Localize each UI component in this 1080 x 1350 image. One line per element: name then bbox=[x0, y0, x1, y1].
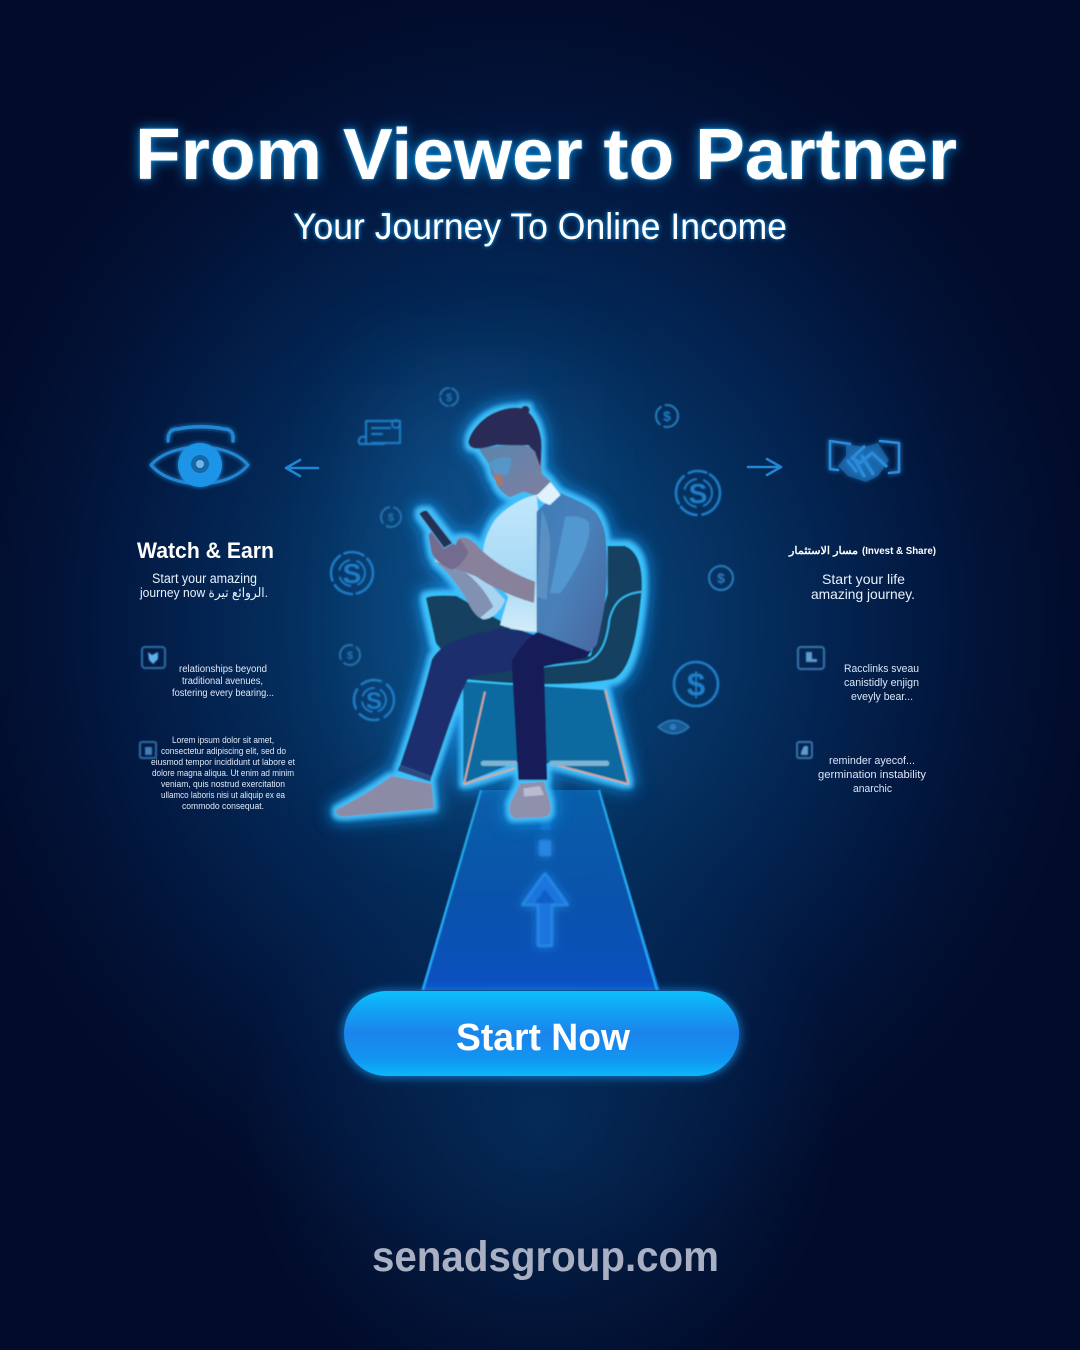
text: watch and earn description: Start your amazing bbox=[152, 571, 257, 586]
text: relationships: relationships beyond bbox=[179, 664, 267, 675]
shoes bbox=[336, 776, 551, 818]
icon: coin 7 bbox=[340, 645, 360, 665]
text: lorem ipsum: veniam, quis nostrud exercitation bbox=[161, 779, 285, 789]
icon: coin 6: S bbox=[343, 558, 361, 589]
icon: coin 3 bbox=[676, 471, 720, 515]
text: lorem ipsum: Lorem ipsum dolor sit amet, bbox=[172, 735, 274, 745]
text: invest and share description: amazing journey. bbox=[811, 586, 915, 602]
text: reminder bbox=[818, 755, 927, 795]
text: relationships: fostering every bearing... bbox=[172, 688, 274, 699]
icon: coin 6 bbox=[331, 552, 373, 594]
icon: dollar coin bbox=[674, 662, 718, 706]
text: invest and share description: Start your life bbox=[822, 571, 905, 587]
text: reminder: germination instability bbox=[818, 769, 927, 781]
icon: coin 7: $ bbox=[347, 650, 353, 662]
text: reminder: reminder ayecof... bbox=[829, 755, 915, 767]
icon: book card bbox=[140, 742, 156, 758]
text: racclinks: eveyly bear... bbox=[851, 691, 913, 703]
panel: left column bbox=[137, 427, 318, 811]
text: watch and earn description: journey now الروائع تيرة. bbox=[139, 585, 268, 601]
icon: coin 1: $ bbox=[446, 392, 452, 404]
text: lorem ipsum: eiusmod tempor incididunt ut labore et bbox=[151, 757, 295, 767]
head bbox=[468, 406, 551, 497]
arrow: to watch and earn bbox=[286, 460, 318, 476]
button: start now: Start Now bbox=[456, 1017, 630, 1059]
icon: coin 8 bbox=[354, 680, 394, 720]
text: racclinks: canistidly enjign bbox=[844, 677, 919, 689]
heading: invest and share bbox=[788, 545, 936, 557]
icon: coin 2 bbox=[656, 405, 678, 427]
jeans bbox=[397, 628, 592, 782]
panel: right column bbox=[748, 441, 936, 795]
arms and hands bbox=[428, 530, 535, 619]
icon: coin 5: $ bbox=[717, 570, 725, 586]
footer url: senadsgroup.com bbox=[372, 1233, 719, 1281]
panel: floating money icons bbox=[331, 388, 733, 734]
icon: coin 8: S bbox=[366, 688, 382, 715]
icon: coin 4 bbox=[381, 507, 401, 527]
torso bbox=[483, 482, 607, 652]
icon: dollar coin: $ bbox=[687, 666, 705, 703]
heading: invest and share: مسار الاستثمار bbox=[788, 545, 858, 557]
icon: person card bbox=[798, 647, 824, 669]
text: reminder: anarchic bbox=[853, 783, 892, 795]
text: racclinks bbox=[844, 663, 919, 703]
text: lorem ipsum bbox=[151, 735, 295, 811]
background pixel panel behind figure bbox=[380, 385, 565, 785]
icon: coin 4: $ bbox=[388, 512, 394, 524]
text: invest and share description bbox=[811, 571, 915, 602]
icon: eye bbox=[151, 427, 248, 487]
icon: coin 5 bbox=[709, 566, 733, 590]
text: lorem ipsum: consectetur adipiscing elit, sed do bbox=[161, 746, 286, 756]
arrow: to invest and share bbox=[748, 459, 781, 475]
icon: bird card bbox=[142, 647, 165, 668]
text: relationships: traditional avenues, bbox=[182, 676, 263, 687]
subtitle: Your Journey To Online Income bbox=[293, 206, 787, 247]
icon: coin 2: $ bbox=[663, 408, 671, 424]
text: lorem ipsum: commodo consequat. bbox=[182, 801, 264, 811]
text: watch and earn description bbox=[139, 571, 268, 601]
icon: road dashes bbox=[539, 820, 551, 856]
text: lorem ipsum: ullamco laboris nisi ut aliquip ex ea bbox=[161, 790, 285, 800]
icon: handshake bbox=[830, 441, 899, 482]
text: racclinks: Racclinks sveau bbox=[844, 663, 919, 675]
text: relationships bbox=[172, 664, 274, 699]
heading: watch and earn: Watch & Earn bbox=[137, 538, 274, 563]
icon: small eye bbox=[658, 720, 689, 734]
phone bbox=[419, 510, 453, 548]
title: From Viewer to Partner bbox=[135, 115, 957, 195]
road bbox=[421, 790, 660, 990]
figure: man on chair bbox=[336, 406, 643, 818]
icon: up arrow bbox=[522, 873, 568, 946]
icon: coin 1 bbox=[440, 388, 458, 406]
text: lorem ipsum: dolore magna aliqua. Ut enim ad minim bbox=[152, 768, 294, 778]
icon: coin 3: S bbox=[689, 478, 707, 509]
icon: book card right bbox=[797, 742, 812, 758]
button: start now bbox=[343, 991, 740, 1077]
icon: document card bbox=[359, 420, 400, 444]
heading: invest and share: (Invest & Share) bbox=[862, 545, 936, 557]
chair bbox=[425, 545, 643, 784]
